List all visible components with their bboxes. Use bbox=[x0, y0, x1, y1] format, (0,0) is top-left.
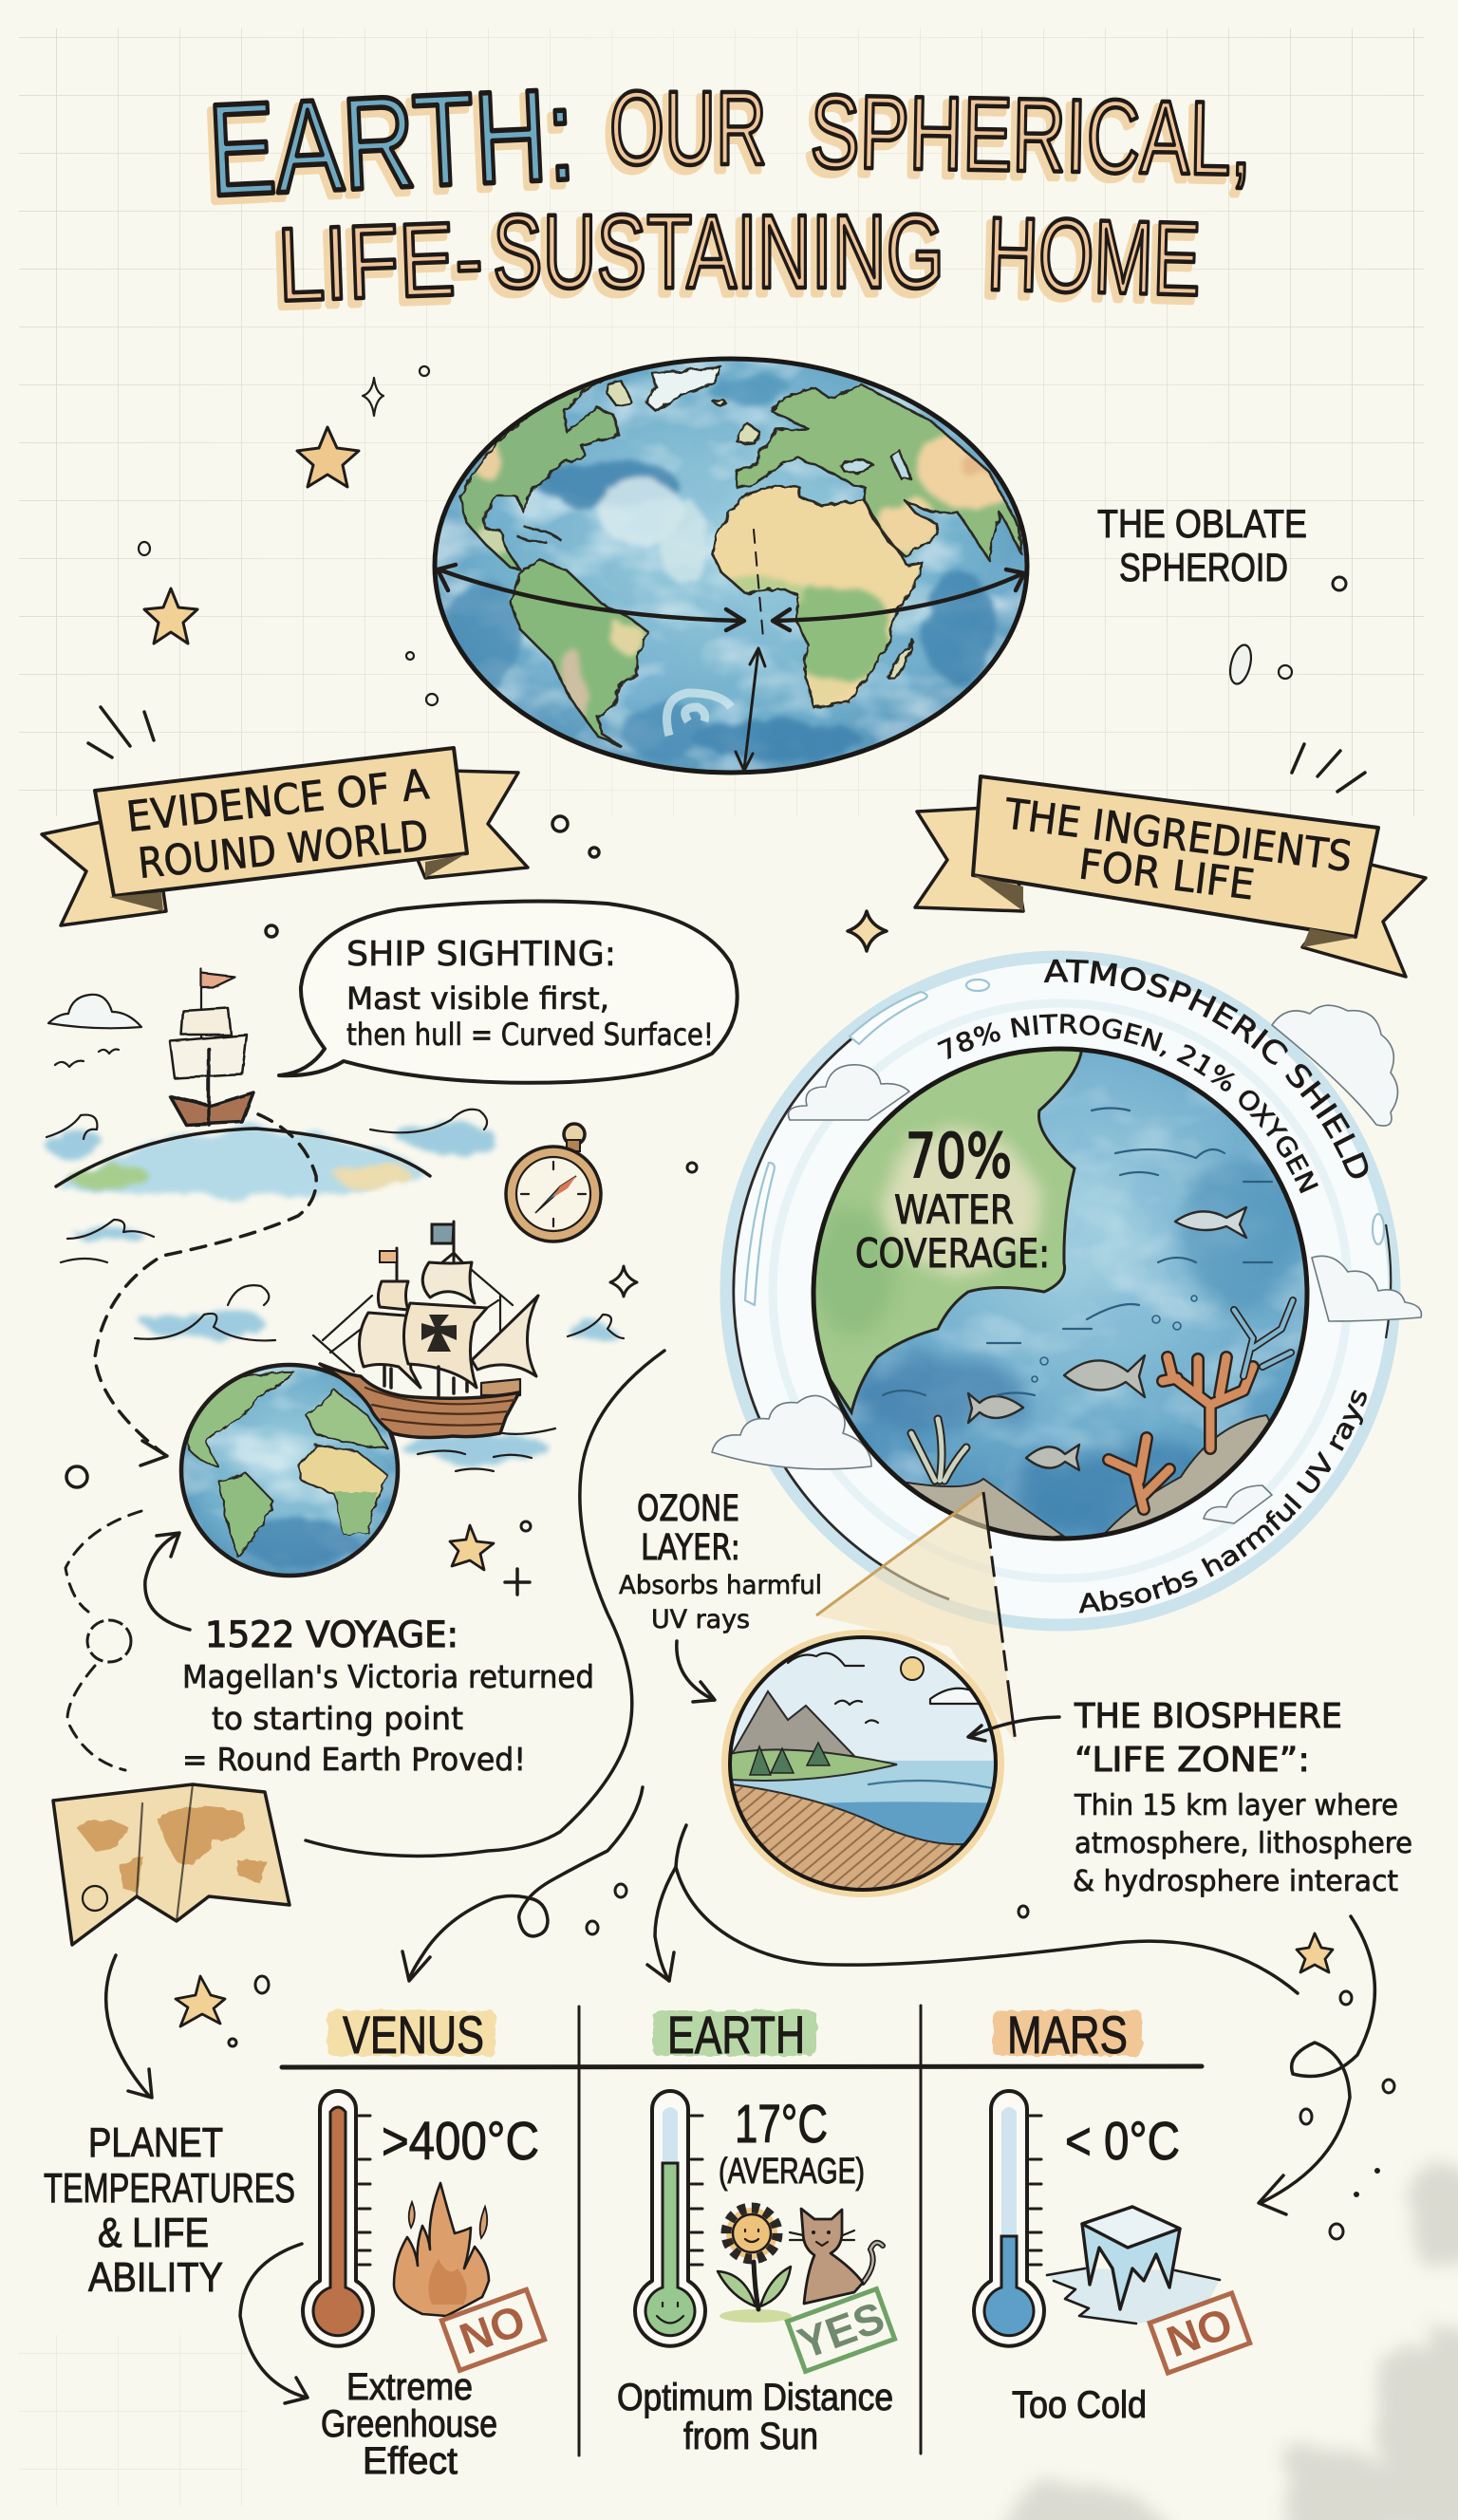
venus note bbox=[321, 2366, 497, 2482]
icon: sunflower bbox=[718, 2208, 792, 2323]
title shadow bbox=[200, 67, 1248, 329]
faint graph paper grid, upper page bbox=[19, 28, 1433, 816]
icon: flame bbox=[394, 2183, 489, 2316]
1522 voyage text: to starting point bbox=[212, 1700, 463, 1737]
table rules bbox=[282, 2066, 1202, 2067]
venus note: Greenhouse bbox=[321, 2403, 497, 2445]
icon: cat bbox=[790, 2209, 883, 2304]
comparison table bbox=[282, 2005, 1202, 2455]
arrows: equatorial and polar radius bbox=[438, 530, 1024, 771]
venus thermometer bbox=[303, 2091, 373, 2346]
planet temperatures heading bbox=[44, 2119, 295, 2301]
icon: ice block bbox=[1047, 2207, 1220, 2324]
planet temperatures heading: ABILITY bbox=[88, 2254, 223, 2301]
banner text: ROUND WORLD bbox=[136, 812, 431, 888]
title bbox=[200, 62, 1253, 329]
arrow to earth column bbox=[647, 1825, 686, 1981]
long arrow line toward mars bbox=[676, 1867, 1298, 1993]
column headers: EARTH bbox=[667, 2005, 805, 2064]
small ship bbox=[170, 969, 253, 1125]
stamp: no: NO bbox=[453, 2295, 532, 2363]
ozone layer text: OZONE bbox=[637, 1488, 739, 1529]
mars temperature: < 0°C bbox=[1065, 2111, 1180, 2172]
earth note: from Sun bbox=[683, 2416, 818, 2457]
land area bbox=[797, 1039, 1082, 1412]
bubble text: then hull = Curved Surface! bbox=[346, 1017, 714, 1053]
column headers: MARS bbox=[1007, 2005, 1128, 2064]
biosphere text: “LIFE ZONE”: bbox=[1075, 1741, 1310, 1780]
label: the oblate spheroid bbox=[1097, 501, 1307, 589]
biosphere text bbox=[1073, 1697, 1412, 1898]
1522 voyage text: = Round Earth Proved! bbox=[182, 1741, 526, 1778]
coastlines bbox=[460, 367, 1021, 746]
title line one: OUR bbox=[609, 70, 767, 187]
70 percent label: COVERAGE: bbox=[855, 1230, 1050, 1277]
biosphere text: Thin 15 km layer where bbox=[1074, 1789, 1398, 1822]
title line one: SPHERICAL, bbox=[810, 73, 1253, 197]
biosphere text: atmosphere, lithosphere bbox=[1075, 1827, 1412, 1860]
bubble text: SHIP SIGHTING: bbox=[346, 935, 616, 974]
cloud and birds bbox=[48, 995, 141, 1067]
fish bbox=[968, 1207, 1246, 1470]
stamp: no bbox=[1150, 2293, 1250, 2373]
banner text: EVIDENCE OF A bbox=[124, 760, 431, 842]
biosphere text: THE BIOSPHERE bbox=[1074, 1697, 1342, 1736]
arrow to greenhouse effect bbox=[240, 2244, 308, 2403]
title shadow: SUSTAINING bbox=[488, 199, 940, 316]
stars by globe bbox=[66, 1466, 531, 1595]
ozone layer text: LAYER: bbox=[641, 1527, 740, 1568]
banner text: FOR LIFE bbox=[1076, 840, 1257, 910]
biosphere inset circle bbox=[717, 1623, 1006, 1898]
title line one: EARTH: bbox=[205, 62, 578, 224]
wave marks bbox=[883, 1109, 1272, 1395]
arrow to mini globe bbox=[145, 1533, 190, 1630]
banner: evidence of a round world bbox=[42, 748, 528, 925]
banner: the ingredients for life bbox=[915, 776, 1426, 977]
earth temperature: 17°C bbox=[735, 2094, 828, 2155]
title shadow: EARTH: bbox=[200, 67, 573, 230]
ozone layer text: Absorbs harmful bbox=[619, 1571, 822, 1600]
dashed loop route left bbox=[65, 1511, 141, 1770]
globe ocean bbox=[435, 359, 1028, 773]
label: the oblate spheroid: SPHEROID bbox=[1119, 545, 1288, 589]
venus note: Effect bbox=[363, 2440, 458, 2482]
title line two: SUSTAINING bbox=[493, 194, 944, 310]
clouds around shield bbox=[712, 1005, 1421, 1523]
banner text bbox=[124, 760, 431, 888]
ozone layer text: UV rays bbox=[651, 1605, 750, 1634]
planet temperatures heading: PLANET bbox=[88, 2119, 223, 2166]
title shadow: HOME bbox=[981, 201, 1198, 324]
zoom callout wedge bbox=[816, 1492, 1016, 1743]
mini globe land bbox=[188, 1372, 388, 1557]
ocean swirl bbox=[666, 693, 731, 736]
stamp: no bbox=[441, 2289, 545, 2370]
title shadow: OUR bbox=[605, 76, 762, 193]
stamp: no: NO bbox=[1160, 2298, 1239, 2366]
1522 voyage text: Magellan's Victoria returned bbox=[182, 1658, 594, 1695]
arrow to venus bbox=[402, 1787, 643, 1981]
corals bbox=[911, 1300, 1293, 1509]
title line two: LIFE- bbox=[276, 200, 485, 324]
planet temperatures heading: & LIFE bbox=[98, 2210, 209, 2256]
flowing divider line bbox=[306, 1351, 664, 1856]
label: the oblate spheroid: THE OBLATE bbox=[1097, 501, 1307, 546]
horizon with small ship bbox=[48, 969, 430, 1198]
1522 voyage text bbox=[182, 1615, 594, 1778]
curved earth horizon bbox=[56, 1129, 430, 1198]
bubble text bbox=[346, 935, 714, 1053]
stamp: yes: YES bbox=[792, 2292, 890, 2368]
1522 voyage text: 1522 VOYAGE: bbox=[205, 1615, 458, 1655]
dashed route from horizon to globe bbox=[95, 1114, 316, 1465]
atmospheric shield labels: Absorbs harmful UV rays bbox=[1078, 1390, 1367, 1614]
mars thermometer bbox=[974, 2091, 1044, 2346]
title line one bbox=[205, 62, 1253, 224]
atmospheric shield circle bbox=[712, 957, 1421, 1625]
earth temperature: (AVERAGE) bbox=[719, 2152, 865, 2192]
arrow from ozone text to inset bbox=[677, 1641, 715, 1702]
galleon ship bbox=[313, 1222, 538, 1437]
speech bubble: ship sighting bbox=[279, 902, 738, 1083]
earth note: Optimum Distance bbox=[617, 2377, 893, 2418]
faint graph paper grid, lower left bbox=[19, 2335, 247, 2506]
70 percent label bbox=[855, 1122, 1050, 1277]
ozone layer text bbox=[619, 1488, 822, 1634]
watercolor stains, bottom right bbox=[997, 2164, 1458, 2520]
oblate spheroid globe bbox=[435, 359, 1028, 773]
70 percent label: WATER bbox=[894, 1186, 1014, 1233]
mini earth globe bbox=[180, 1365, 399, 1576]
mars note: Too Cold bbox=[1012, 2384, 1147, 2426]
70 percent label: 70% bbox=[906, 1122, 1012, 1192]
venus temperature: >400°C bbox=[382, 2111, 539, 2172]
arrow from map to planet temperatures bbox=[106, 1955, 152, 2098]
title line two: HOME bbox=[985, 196, 1203, 318]
arrow to mars bbox=[1259, 1916, 1374, 2214]
banner text: THE INGREDIENTS bbox=[1001, 790, 1355, 882]
lower decorative stars and bubbles bbox=[176, 1884, 1394, 2239]
column headers bbox=[327, 2005, 1142, 2064]
biosphere pointer bbox=[968, 1717, 1059, 1741]
sparkle and circle near compass bbox=[610, 1163, 697, 1297]
biosphere text: & hydrosphere interact bbox=[1073, 1865, 1398, 1898]
waves bbox=[44, 1110, 624, 1471]
planet water coverage bbox=[797, 1039, 1307, 1547]
atmospheric shield labels: ATMOSPHERIC SHIELD bbox=[1044, 959, 1369, 1179]
earth temperature bbox=[719, 2094, 865, 2192]
shield rim ink, left and right bbox=[734, 1033, 949, 1599]
land masses bbox=[460, 367, 1021, 746]
small circles near left banner bbox=[266, 816, 599, 937]
compass bbox=[506, 1124, 601, 1241]
title line two bbox=[276, 194, 1203, 324]
venus note: Extreme bbox=[346, 2366, 473, 2408]
bubble text: Mast visible first, bbox=[346, 980, 609, 1017]
earth note bbox=[617, 2377, 893, 2457]
atmospheric shield labels: 78% NITROGEN, 21% OXYGEN bbox=[937, 1014, 1318, 1194]
mars column bbox=[974, 2091, 1250, 2426]
sea floor rocks bbox=[907, 1477, 1065, 1536]
atmospheric shield labels bbox=[937, 959, 1369, 1614]
burst marks and sparkle by right banner bbox=[848, 744, 1365, 951]
decorative stars and bubbles around globe bbox=[88, 366, 1346, 757]
treasure map bbox=[53, 1784, 290, 1945]
globe outline bbox=[435, 359, 1027, 773]
earth column bbox=[617, 2091, 895, 2457]
title shadow: LIFE- bbox=[271, 206, 480, 329]
column headers: VENUS bbox=[343, 2005, 484, 2064]
title shadow: SPHERICAL, bbox=[805, 79, 1248, 203]
planet temperatures heading: TEMPERATURES bbox=[44, 2165, 295, 2212]
venus column bbox=[303, 2091, 545, 2482]
earth thermometer bbox=[635, 2091, 705, 2346]
